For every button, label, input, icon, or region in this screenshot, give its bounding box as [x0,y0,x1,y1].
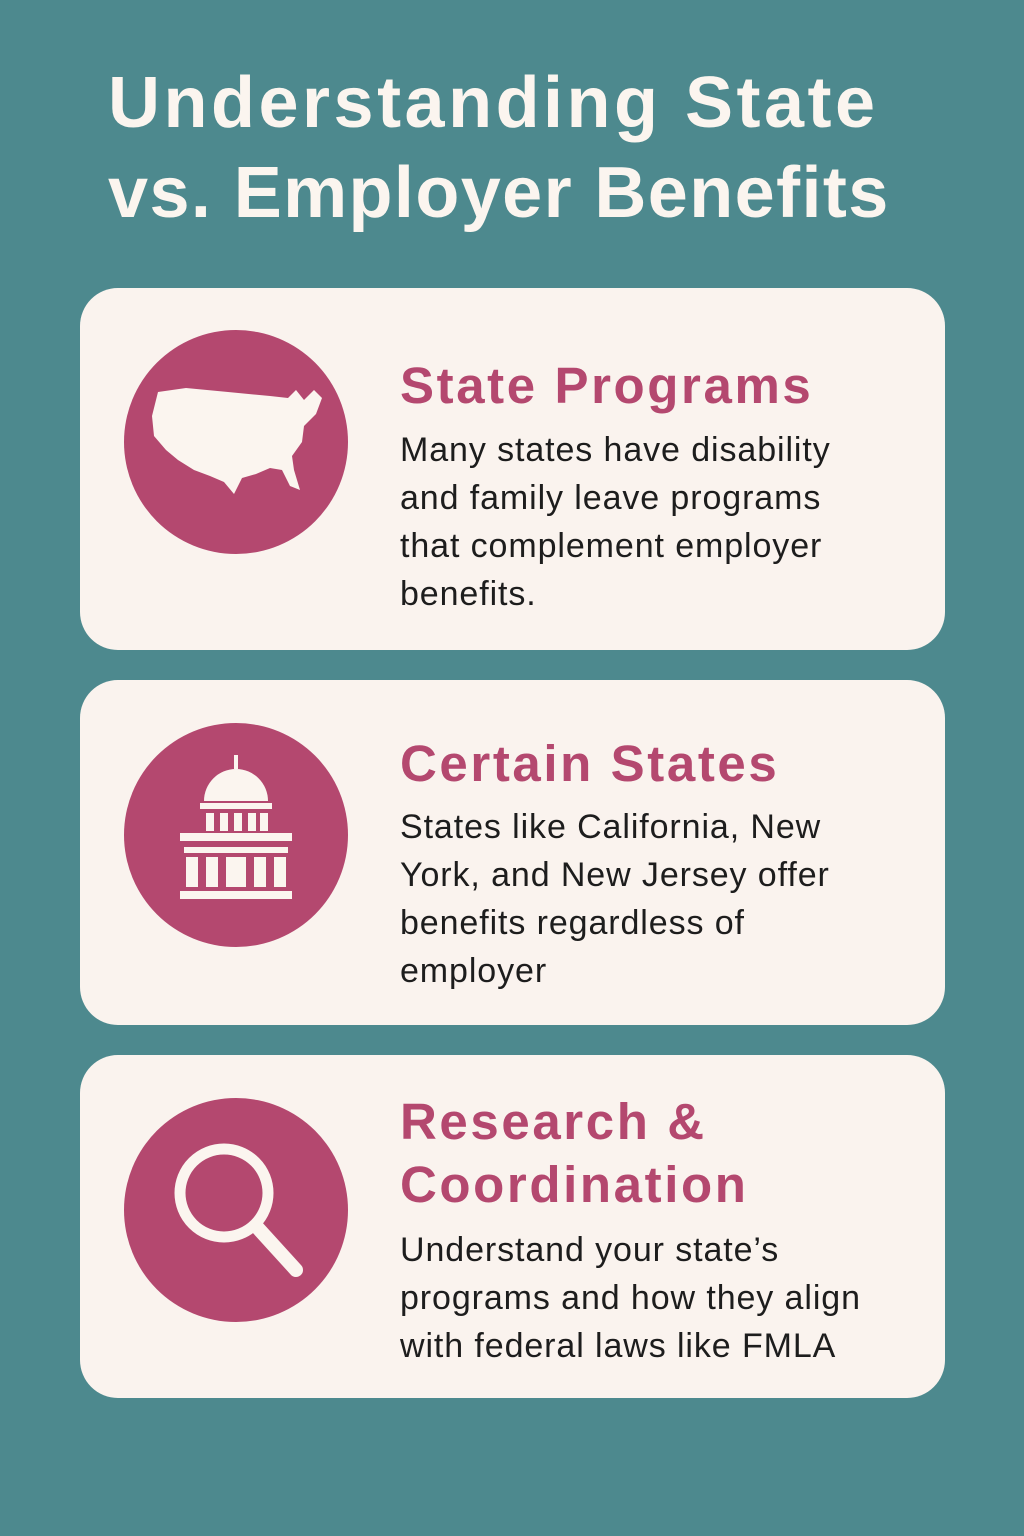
body text: Understand your state’s [400,1231,779,1269]
heading [400,1093,748,1213]
body text [400,808,830,990]
body text: States like California, New [400,808,821,846]
title [108,63,890,233]
icon: US map [124,330,348,554]
body text: York, and New Jersey offer [400,856,830,894]
body text: benefits regardless of [400,904,745,942]
body text: with federal laws like FMLA [400,1327,836,1365]
heading: Research & [400,1093,707,1150]
icon: magnifying glass [124,1098,348,1322]
heading: Certain States [400,735,779,792]
icon: capitol building [124,723,348,947]
body text: programs and how they align [400,1279,861,1317]
body text: and family leave programs [400,479,821,517]
body text: benefits. [400,575,537,613]
body text [400,1231,861,1365]
body text: that complement employer [400,527,822,565]
body text [400,431,831,613]
heading: Coordination [400,1156,748,1213]
panel: certain states [80,680,945,1025]
body text: employer [400,952,547,990]
panel: research & coordination [80,1055,945,1398]
panel: state programs [80,288,945,650]
title: vs. Employer Benefits [108,153,890,233]
title: Understanding State [108,63,879,143]
body text: Many states have disability [400,431,831,469]
heading: State Programs [400,357,813,414]
